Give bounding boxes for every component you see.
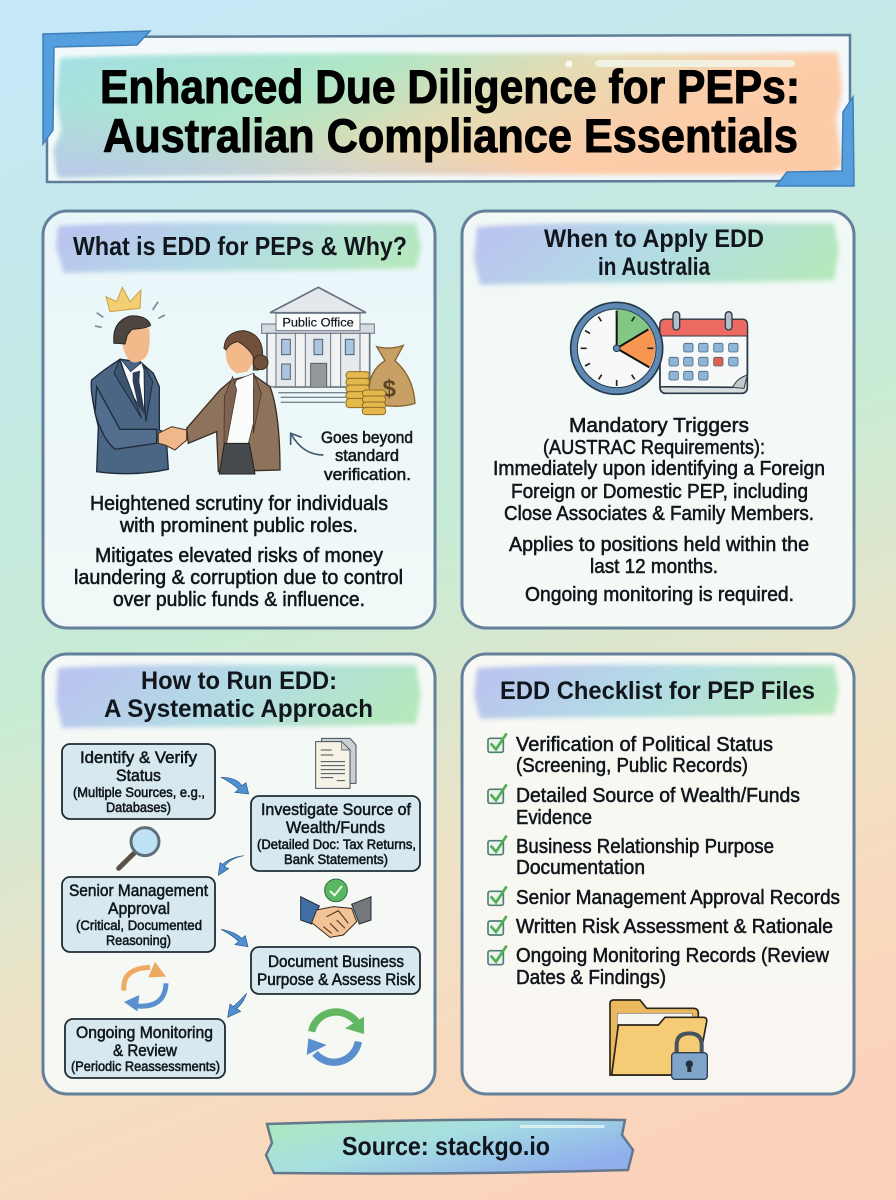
icon: approval handshake <box>301 879 371 937</box>
checklist icons <box>488 733 507 965</box>
heading: What is EDD for PEPs & Why? <box>73 231 407 261</box>
checklist text <box>516 733 840 989</box>
title text: Australian Compliance Essentials <box>103 109 798 162</box>
figure: man in suit <box>91 316 168 474</box>
checklist text: Ongoing Monitoring Records (Review <box>516 944 829 967</box>
step 5: & Review <box>113 1041 178 1060</box>
title text: Enhanced Due Diligence for PEPs: <box>100 60 800 113</box>
text block: triggers <box>493 415 825 606</box>
text block: triggers: Ongoing monitoring is required. <box>525 584 794 606</box>
title corner: bottom right <box>776 97 854 186</box>
step 1: (Multiple Sources, e.g., <box>73 785 205 800</box>
step 1 <box>62 744 215 819</box>
text block: description: with prominent public roles. <box>119 515 358 537</box>
arrow: goes beyond <box>291 433 323 455</box>
heading band <box>56 665 421 728</box>
arrow: step 2 to 3 <box>218 856 244 875</box>
icon: coins <box>346 372 386 415</box>
text block: triggers: last 12 months. <box>590 556 718 578</box>
icon: money bag: $ <box>383 376 396 403</box>
title corner: top left <box>43 31 150 144</box>
arrow: step 3 to 4 <box>221 929 248 947</box>
title banner <box>43 31 854 186</box>
heading <box>544 225 764 281</box>
icon: clock <box>571 302 663 394</box>
step 5: Ongoing Monitoring <box>76 1023 213 1042</box>
checklist text: Verification of Political Status <box>516 733 773 756</box>
step 3 <box>62 877 215 952</box>
step 3: (Critical, Documented <box>76 918 202 933</box>
heading: When to Apply EDD <box>544 225 764 253</box>
heading: EDD Checklist for PEP Files <box>500 677 815 705</box>
step 1: Identify & Verify <box>80 748 197 767</box>
heading: How to Run EDD: <box>141 667 337 695</box>
illustration: public figures, office and money <box>91 287 415 474</box>
panel: how to run EDD <box>43 654 435 1094</box>
heading band <box>474 223 839 285</box>
text block: triggers: Immediately upon identifying a Foreign <box>493 458 825 480</box>
heading <box>104 667 373 723</box>
icon: building: Public Office <box>282 316 354 330</box>
panel: what is EDD <box>43 211 435 628</box>
checklist text: Written Risk Assessment & Rationale <box>516 915 833 938</box>
step 4 <box>251 947 420 994</box>
icon: clasped hands <box>158 427 187 450</box>
icon: calendar <box>660 312 747 393</box>
step 2: Investigate Source of <box>261 800 411 819</box>
icon: building <box>262 287 374 402</box>
step 2: Bank Statements) <box>284 852 388 867</box>
step 1: Status <box>116 766 161 785</box>
text block: triggers: Applies to positions held within the <box>509 534 809 556</box>
checklist text: Business Relationship Purpose <box>516 835 774 858</box>
arrow: step 1 to 2 <box>221 777 249 794</box>
text block: triggers: Foreign or Domestic PEP, including <box>511 481 808 503</box>
arrow: step 4 to 5 <box>228 993 247 1017</box>
text block: triggers: Mandatory Triggers <box>569 415 749 437</box>
callout: goes beyond <box>321 428 413 484</box>
step 3: Approval <box>108 899 170 918</box>
text block: description: laundering & corruption due to control <box>74 567 403 589</box>
text block: description <box>74 493 403 611</box>
icon: money bag <box>369 345 415 406</box>
callout: goes beyond: Goes beyond <box>321 428 413 447</box>
step 5 <box>65 1019 225 1078</box>
checklist text: (Screening, Public Records) <box>516 754 748 777</box>
step 1: Databases) <box>106 800 171 815</box>
title text <box>100 60 800 162</box>
step 5: (Periodic Reassessments) <box>71 1059 220 1074</box>
source footer ribbon <box>266 1120 633 1174</box>
checklist text: Documentation <box>516 856 645 879</box>
checklist text: Evidence <box>516 806 592 829</box>
step 2: Wealth/Funds <box>286 818 385 837</box>
icon: magnifying glass <box>119 828 159 868</box>
panel: when to apply <box>462 211 854 628</box>
source text: Source: stackgo.io <box>342 1131 550 1161</box>
step 3: Senior Management <box>69 881 208 900</box>
text block: description: Heightened scrutiny for individuals <box>90 493 388 515</box>
panel: checklist <box>462 654 854 1094</box>
icon: clock and calendar <box>571 302 747 394</box>
step 4: Purpose & Assess Risk <box>257 970 415 989</box>
icon: locked folder <box>610 1000 707 1079</box>
text block: triggers: Close Associates & Family Members. <box>504 503 814 525</box>
figure: woman in jacket <box>187 331 280 474</box>
checklist text: Detailed Source of Wealth/Funds <box>516 784 800 807</box>
icon: green and blue cycle <box>307 1012 364 1062</box>
text block: description: over public funds & influence. <box>113 589 365 611</box>
callout: goes beyond: verification. <box>324 465 411 484</box>
heading: A Systematic Approach <box>104 695 373 723</box>
heading band <box>56 223 421 273</box>
text block: description: Mitigates elevated risks of money <box>95 545 383 567</box>
checklist text: Senior Management Approval Records <box>516 886 840 909</box>
callout: goes beyond: standard <box>335 446 399 465</box>
icon: crown <box>95 287 165 327</box>
icons and arrows of the process <box>119 738 371 1062</box>
step 2: (Detailed Doc: Tax Returns, <box>257 837 416 852</box>
checklist text: Dates & Findings) <box>516 966 666 989</box>
text block: triggers: (AUSTRAC Requirements): <box>543 437 765 459</box>
step 2 <box>251 796 420 871</box>
icon: document <box>316 738 356 788</box>
heading band <box>474 665 839 719</box>
heading: in Australia <box>598 253 711 281</box>
icon: orange and blue cycle <box>124 962 166 1011</box>
step 3: Reasoning) <box>106 933 171 948</box>
step 4: Document Business <box>268 952 404 971</box>
